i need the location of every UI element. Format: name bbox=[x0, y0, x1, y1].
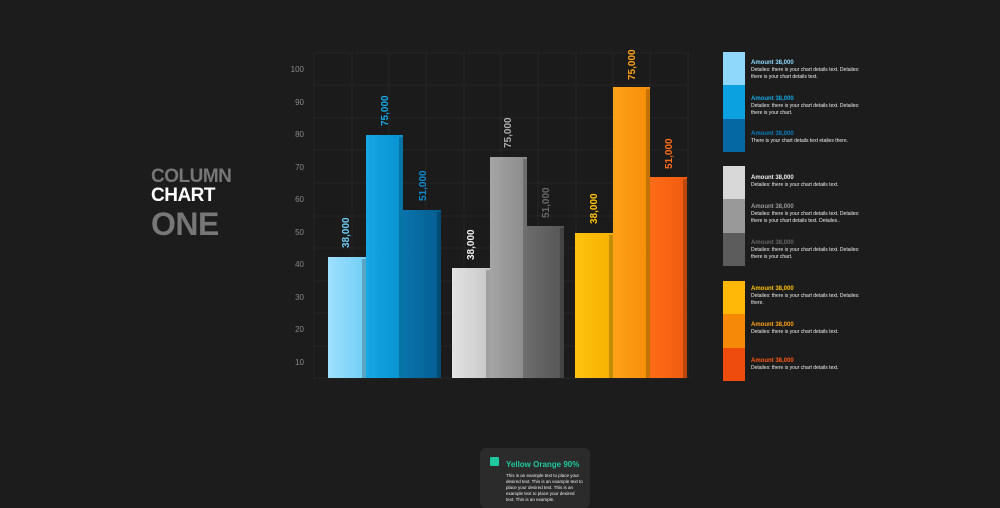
value labels: 75,000 bbox=[503, 117, 514, 148]
legend swatches bbox=[723, 52, 745, 381]
text: Amount 38,000 bbox=[751, 240, 794, 246]
column chart: 100 bbox=[291, 65, 305, 74]
text: Amount 38,000 bbox=[751, 60, 794, 66]
bars bbox=[328, 87, 687, 378]
value labels: 38,000 bbox=[589, 193, 600, 224]
text: Detailes: there is your chart details text. bbox=[751, 329, 839, 335]
callout card bbox=[480, 448, 590, 508]
text: Detailes: there is your chart details text. bbox=[751, 365, 839, 371]
text: Detailes: there is your chart details text. Detailes: there is your chart. bbox=[751, 247, 859, 260]
legend text bbox=[751, 60, 859, 371]
text: Amount 38,000 bbox=[751, 131, 794, 137]
text: Amount 38,000 bbox=[751, 204, 794, 210]
column chart: 10 bbox=[295, 358, 305, 367]
text: Amount 38,000 bbox=[751, 358, 794, 364]
value labels: 38,000 bbox=[466, 229, 477, 260]
value labels: 51,000 bbox=[418, 170, 429, 201]
text: Detailes: there is your chart details text. Detailes: there is your chart. bbox=[751, 103, 859, 116]
value labels: 38,000 bbox=[341, 217, 352, 248]
title: COLUMN bbox=[151, 166, 231, 187]
column chart: 20 bbox=[295, 325, 305, 334]
text: Detailes: there is your chart details text. Detailes: there. bbox=[751, 293, 859, 306]
text: There is your chart details text etailes there. bbox=[751, 138, 848, 144]
value labels: 75,000 bbox=[627, 49, 638, 80]
callout card: This is an example text to place your desired text. This is an example text to place your desired text. This is an example text to place your desired text. This is an example. bbox=[506, 473, 583, 502]
column chart: 60 bbox=[295, 195, 305, 204]
value labels: 75,000 bbox=[380, 95, 391, 126]
title: CHART bbox=[151, 185, 215, 206]
text: Amount 38,000 bbox=[751, 96, 794, 102]
text: Detailes: there is your chart details text. Detailes: there is your chart details text. bbox=[751, 67, 859, 80]
title: ONE bbox=[151, 206, 219, 242]
column chart: 30 bbox=[295, 293, 305, 302]
column chart: 40 bbox=[295, 260, 305, 269]
icon: green square bbox=[490, 457, 499, 466]
value labels bbox=[341, 49, 675, 260]
text: Amount 38,000 bbox=[751, 286, 794, 292]
column chart: 90 bbox=[295, 98, 305, 107]
column chart: 80 bbox=[295, 130, 305, 139]
text: Detailes: there is your chart details text. bbox=[751, 182, 839, 188]
title bbox=[151, 166, 231, 242]
callout card: Yellow Orange 90% bbox=[506, 460, 579, 469]
text: Amount 38,000 bbox=[751, 322, 794, 328]
column chart: 70 bbox=[295, 163, 305, 172]
column chart: 50 bbox=[295, 228, 305, 237]
text: Amount 38,000 bbox=[751, 175, 794, 181]
value labels: 51,000 bbox=[664, 138, 675, 169]
text: Detailes: there is your chart details text. Detailes: there is your chart details text. Detailes.. bbox=[751, 211, 859, 224]
value labels: 51,000 bbox=[541, 187, 552, 218]
